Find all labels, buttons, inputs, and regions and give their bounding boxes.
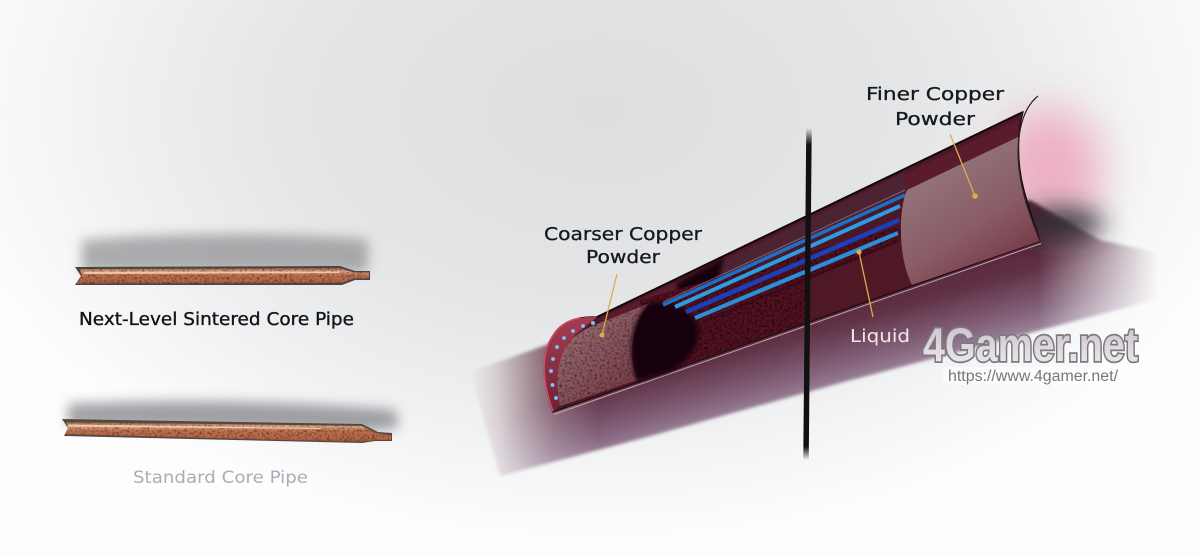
pink glow behind tube end — [998, 108, 1102, 232]
wall dark patch — [676, 258, 724, 296]
top edge line — [597, 112, 1023, 317]
blue liquid channels — [663, 190, 905, 322]
end rim: left — [544, 317, 597, 412]
callout: liquid: Liquid — [850, 326, 910, 347]
vertical divider — [806, 128, 809, 460]
shadow: bottom pipe — [68, 401, 398, 432]
tube cast shadow — [470, 200, 1200, 476]
coarser powder light section — [557, 303, 650, 406]
bottom edge highlight — [554, 244, 1041, 414]
finer copper powder section — [901, 137, 1040, 285]
photo: sintered pipe — [75, 266, 370, 285]
watermark: 4Gamer.net — [923, 318, 1138, 385]
mid wall — [806, 240, 912, 322]
upper wall shade — [715, 172, 905, 280]
callout: finer copper powder: Finer Copper — [866, 84, 1005, 105]
dark shadow behind tube end — [1020, 209, 1104, 239]
watermark: 4Gamer.net: 4Gamer.net — [923, 318, 1138, 371]
callout: finer copper powder: Powder — [895, 109, 976, 130]
callout: coarser copper powder: Coarser Copper — [544, 224, 703, 245]
rim bright edge — [544, 318, 580, 411]
callout: liquid — [850, 249, 910, 347]
panel: vapor chamber tube cutaway — [470, 84, 1200, 476]
inner wall: upper maroon band — [600, 120, 1018, 323]
end rim: right — [1018, 96, 1040, 241]
callout: coarser copper powder: Powder — [586, 247, 661, 268]
panel: standard core pipe — [62, 401, 398, 488]
dark powder interior hole — [631, 302, 698, 381]
tube body — [544, 112, 1040, 412]
label: next-level sintered core pipe: Next-Level Sintered Core Pipe — [79, 310, 354, 330]
coarse powder dark section — [640, 225, 912, 378]
photo: standard pipe — [62, 419, 392, 443]
callout: coarser copper powder — [544, 224, 703, 338]
panel: next-level sintered core pipe — [75, 234, 370, 330]
label: standard core pipe: Standard Core Pipe — [133, 468, 308, 488]
watermark: 4Gamer.net: https://www.4gamer.net/ — [948, 368, 1119, 385]
shadow: top pipe — [82, 234, 368, 272]
callout: finer copper powder — [866, 84, 1005, 199]
pearl dots along wick — [549, 321, 595, 400]
